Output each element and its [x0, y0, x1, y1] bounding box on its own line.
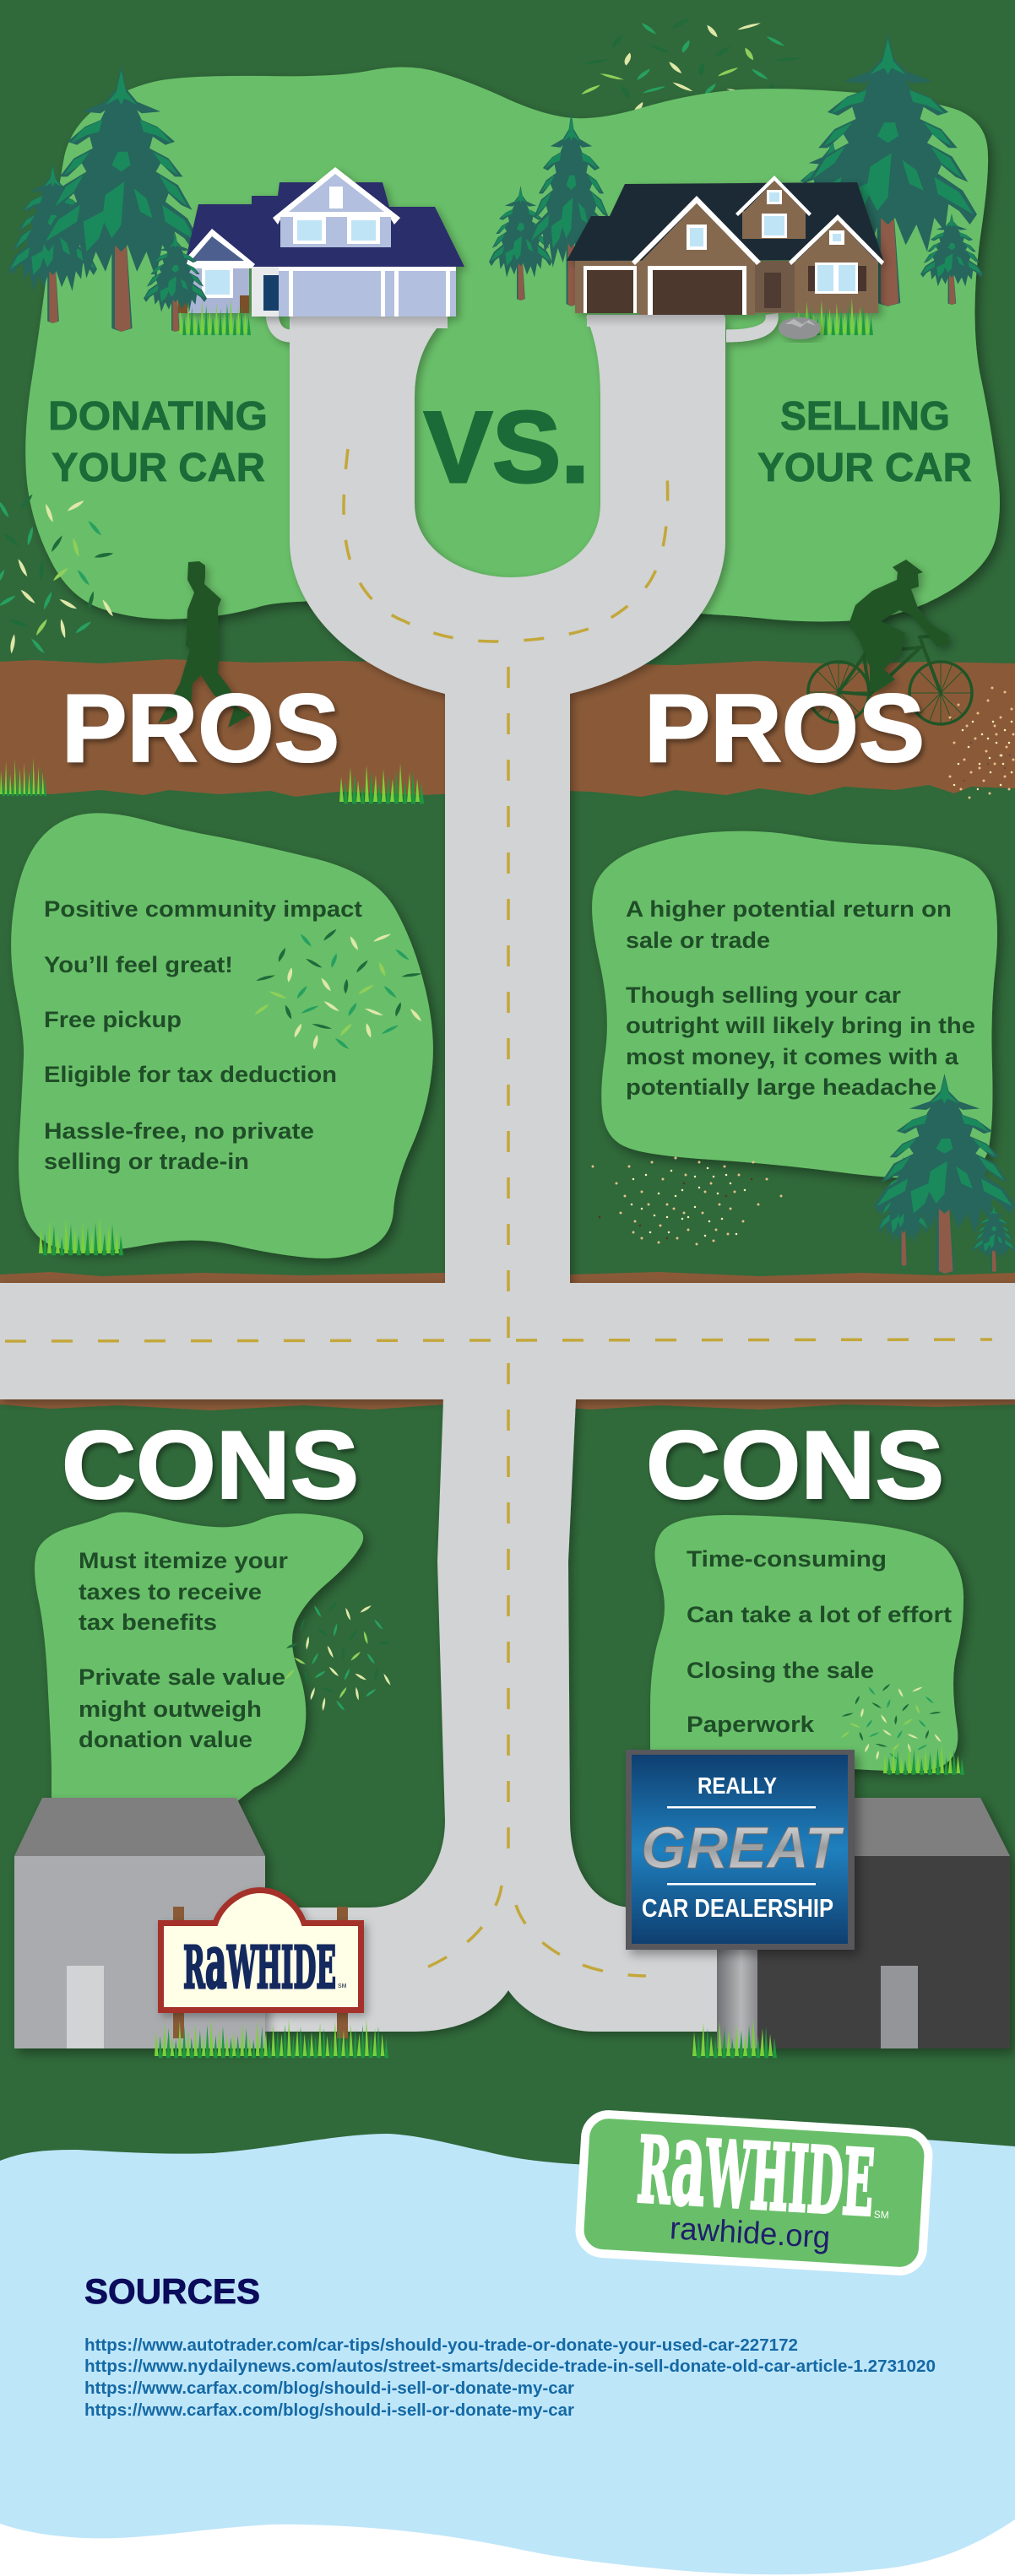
title: selling your car: SELLING	[780, 394, 950, 439]
panel: pros selling blob	[592, 831, 997, 1178]
text: source urls: https://www.nydailynews.com/autos/street-smarts/decide-trade-in-sell-donate-old-car-article-1.2731020	[84, 2357, 936, 2376]
text: pros of selling: most money, it comes with a	[626, 1044, 959, 1069]
dirt strips beside the cross road	[0, 1272, 1015, 1410]
text: pros of donating: Positive community impact	[44, 896, 362, 922]
figure: cyclist silhouette	[808, 560, 972, 724]
leaves: top scatter	[579, 18, 802, 126]
text: pros of selling: sale or trade	[626, 928, 770, 953]
leaves: left of hill	[0, 493, 114, 655]
dirt band behind pros headings	[0, 659, 1015, 797]
tree: pros selling large	[874, 1074, 1015, 1274]
grass: left dirt tuft	[0, 757, 46, 796]
road network: U driveway, main road, cross road and fork	[0, 314, 1015, 2032]
leaves: pros donating blob	[252, 928, 423, 1050]
road shadow below the houses	[291, 317, 448, 328]
title: selling your car	[757, 394, 972, 490]
leaves: cons selling	[840, 1683, 942, 1761]
text: cons of donating: tax benefits	[79, 1610, 217, 1635]
text: cons of selling: Closing the sale	[687, 1658, 874, 1683]
icon: rock by brown house	[779, 317, 821, 339]
speckles: gravel under pros selling	[593, 1158, 781, 1244]
heading: pros donating: PROS	[62, 675, 339, 782]
sign: really great car dealership: REALLY	[697, 1772, 777, 1799]
grass: cons selling blob	[883, 1743, 964, 1775]
house: brown selling home	[567, 176, 884, 315]
text: pros of selling: outright will likely bring in the	[626, 1013, 975, 1038]
figure: pedestrian silhouette	[158, 561, 251, 728]
heading: cons donating: CONS	[62, 1412, 359, 1519]
text: pros of selling: potentially large headache	[626, 1074, 936, 1100]
sign: rawhide roadside sign: SM	[338, 1983, 347, 1989]
text: pros of donating: selling or trade-in	[44, 1149, 249, 1174]
heading: cons selling: CONS	[646, 1412, 944, 1519]
tree: large right	[799, 34, 977, 306]
tree: middle back	[489, 186, 552, 300]
sign: really great car dealership: CAR DEALERSHIP	[642, 1893, 833, 1923]
logo: rawhide badge: SM	[873, 2208, 889, 2222]
panel: cons donating blob	[35, 1513, 363, 1802]
text: pros of selling	[626, 896, 975, 1100]
tree: behind large right	[785, 135, 878, 295]
text: cons of donating: might outweigh	[79, 1697, 262, 1722]
house: blue donating home	[178, 167, 464, 317]
title: vs: VS.	[424, 391, 589, 504]
building: dealership dark building	[757, 1798, 1010, 2048]
panel: cons selling blob	[650, 1515, 963, 1771]
tree: middle	[529, 112, 613, 306]
text: pros of donating: Hassle-free, no private	[44, 1118, 314, 1144]
grass: rawhide sign base	[155, 2019, 388, 2058]
text: cons of donating: donation value	[79, 1727, 252, 1752]
text: pros of donating: Free pickup	[44, 1007, 182, 1032]
title: selling your car: YOUR CAR	[757, 446, 972, 490]
text: cons of selling	[687, 1546, 952, 1737]
text: pros of donating	[44, 896, 362, 1174]
grass: center-left dirt tuft	[339, 763, 424, 804]
text: source urls: https://www.carfax.com/blog/should-i-sell-or-donate-my-car	[84, 2401, 574, 2420]
tree: small beside blue house	[144, 233, 207, 332]
panel: top green hill	[25, 67, 1000, 621]
panel: pros donating blob	[11, 813, 433, 1258]
text: cons of donating: Must itemize your	[79, 1548, 289, 1573]
title: donating your car: DONATING	[48, 394, 268, 439]
text: source urls: https://www.carfax.com/blog/should-i-sell-or-donate-my-car	[84, 2379, 574, 2398]
tree: small right	[920, 214, 983, 305]
tree: pros selling small right	[973, 1204, 1015, 1272]
text: cons of selling: Time-consuming	[687, 1546, 887, 1572]
tree: far left	[8, 163, 97, 323]
speckles: gravel near right pros	[950, 688, 1013, 798]
tree: large left	[42, 65, 200, 332]
sign: rawhide roadside sign: RaWHIDE	[183, 1918, 336, 2005]
sign: really great car dealership: GREAT	[641, 1815, 844, 1881]
heading: pros selling: PROS	[644, 675, 925, 782]
tree: pros selling small left	[878, 1156, 929, 1266]
building: rawhide grey building	[14, 1798, 265, 2048]
road centre dashes	[5, 449, 992, 1976]
grass: pros donating blob	[39, 1216, 123, 1255]
logo: rawhide badge: rawhide.org	[669, 2211, 831, 2254]
road shadow below brown house	[587, 315, 725, 327]
text: cons of donating: taxes to receive	[79, 1579, 262, 1605]
sign: rawhide roadside sign	[160, 1891, 361, 2038]
grass: under brown house	[797, 298, 873, 335]
text: pros of donating: Eligible for tax deduction	[44, 1062, 337, 1087]
footer: light blue water panel	[0, 2134, 1015, 2574]
text: cons of donating: Private sale value	[79, 1664, 285, 1690]
text: cons of selling: Can take a lot of effort	[687, 1602, 952, 1627]
text: source urls: https://www.autotrader.com/car-tips/should-you-trade-or-donate-your-used-car-227172	[84, 2336, 798, 2355]
text: cons of selling: Paperwork	[687, 1712, 815, 1737]
text: pros of donating: You’ll feel great!	[44, 952, 233, 977]
title: donating your car	[48, 394, 268, 490]
text: pros of selling: Though selling your car	[626, 982, 902, 1008]
grass: dealership sign base	[692, 2019, 777, 2058]
text: pros of selling: A higher potential return on	[626, 896, 952, 922]
leaves: cons donating	[285, 1600, 392, 1712]
text: cons of donating	[79, 1548, 289, 1752]
sign: really great car dealership	[626, 1750, 855, 2048]
title: donating your car: YOUR CAR	[52, 446, 265, 490]
grass: under blue house	[179, 298, 251, 335]
text: source urls	[84, 2336, 936, 2420]
logo: rawhide badge	[578, 2087, 931, 2272]
heading: sources: SOURCES	[84, 2271, 260, 2311]
